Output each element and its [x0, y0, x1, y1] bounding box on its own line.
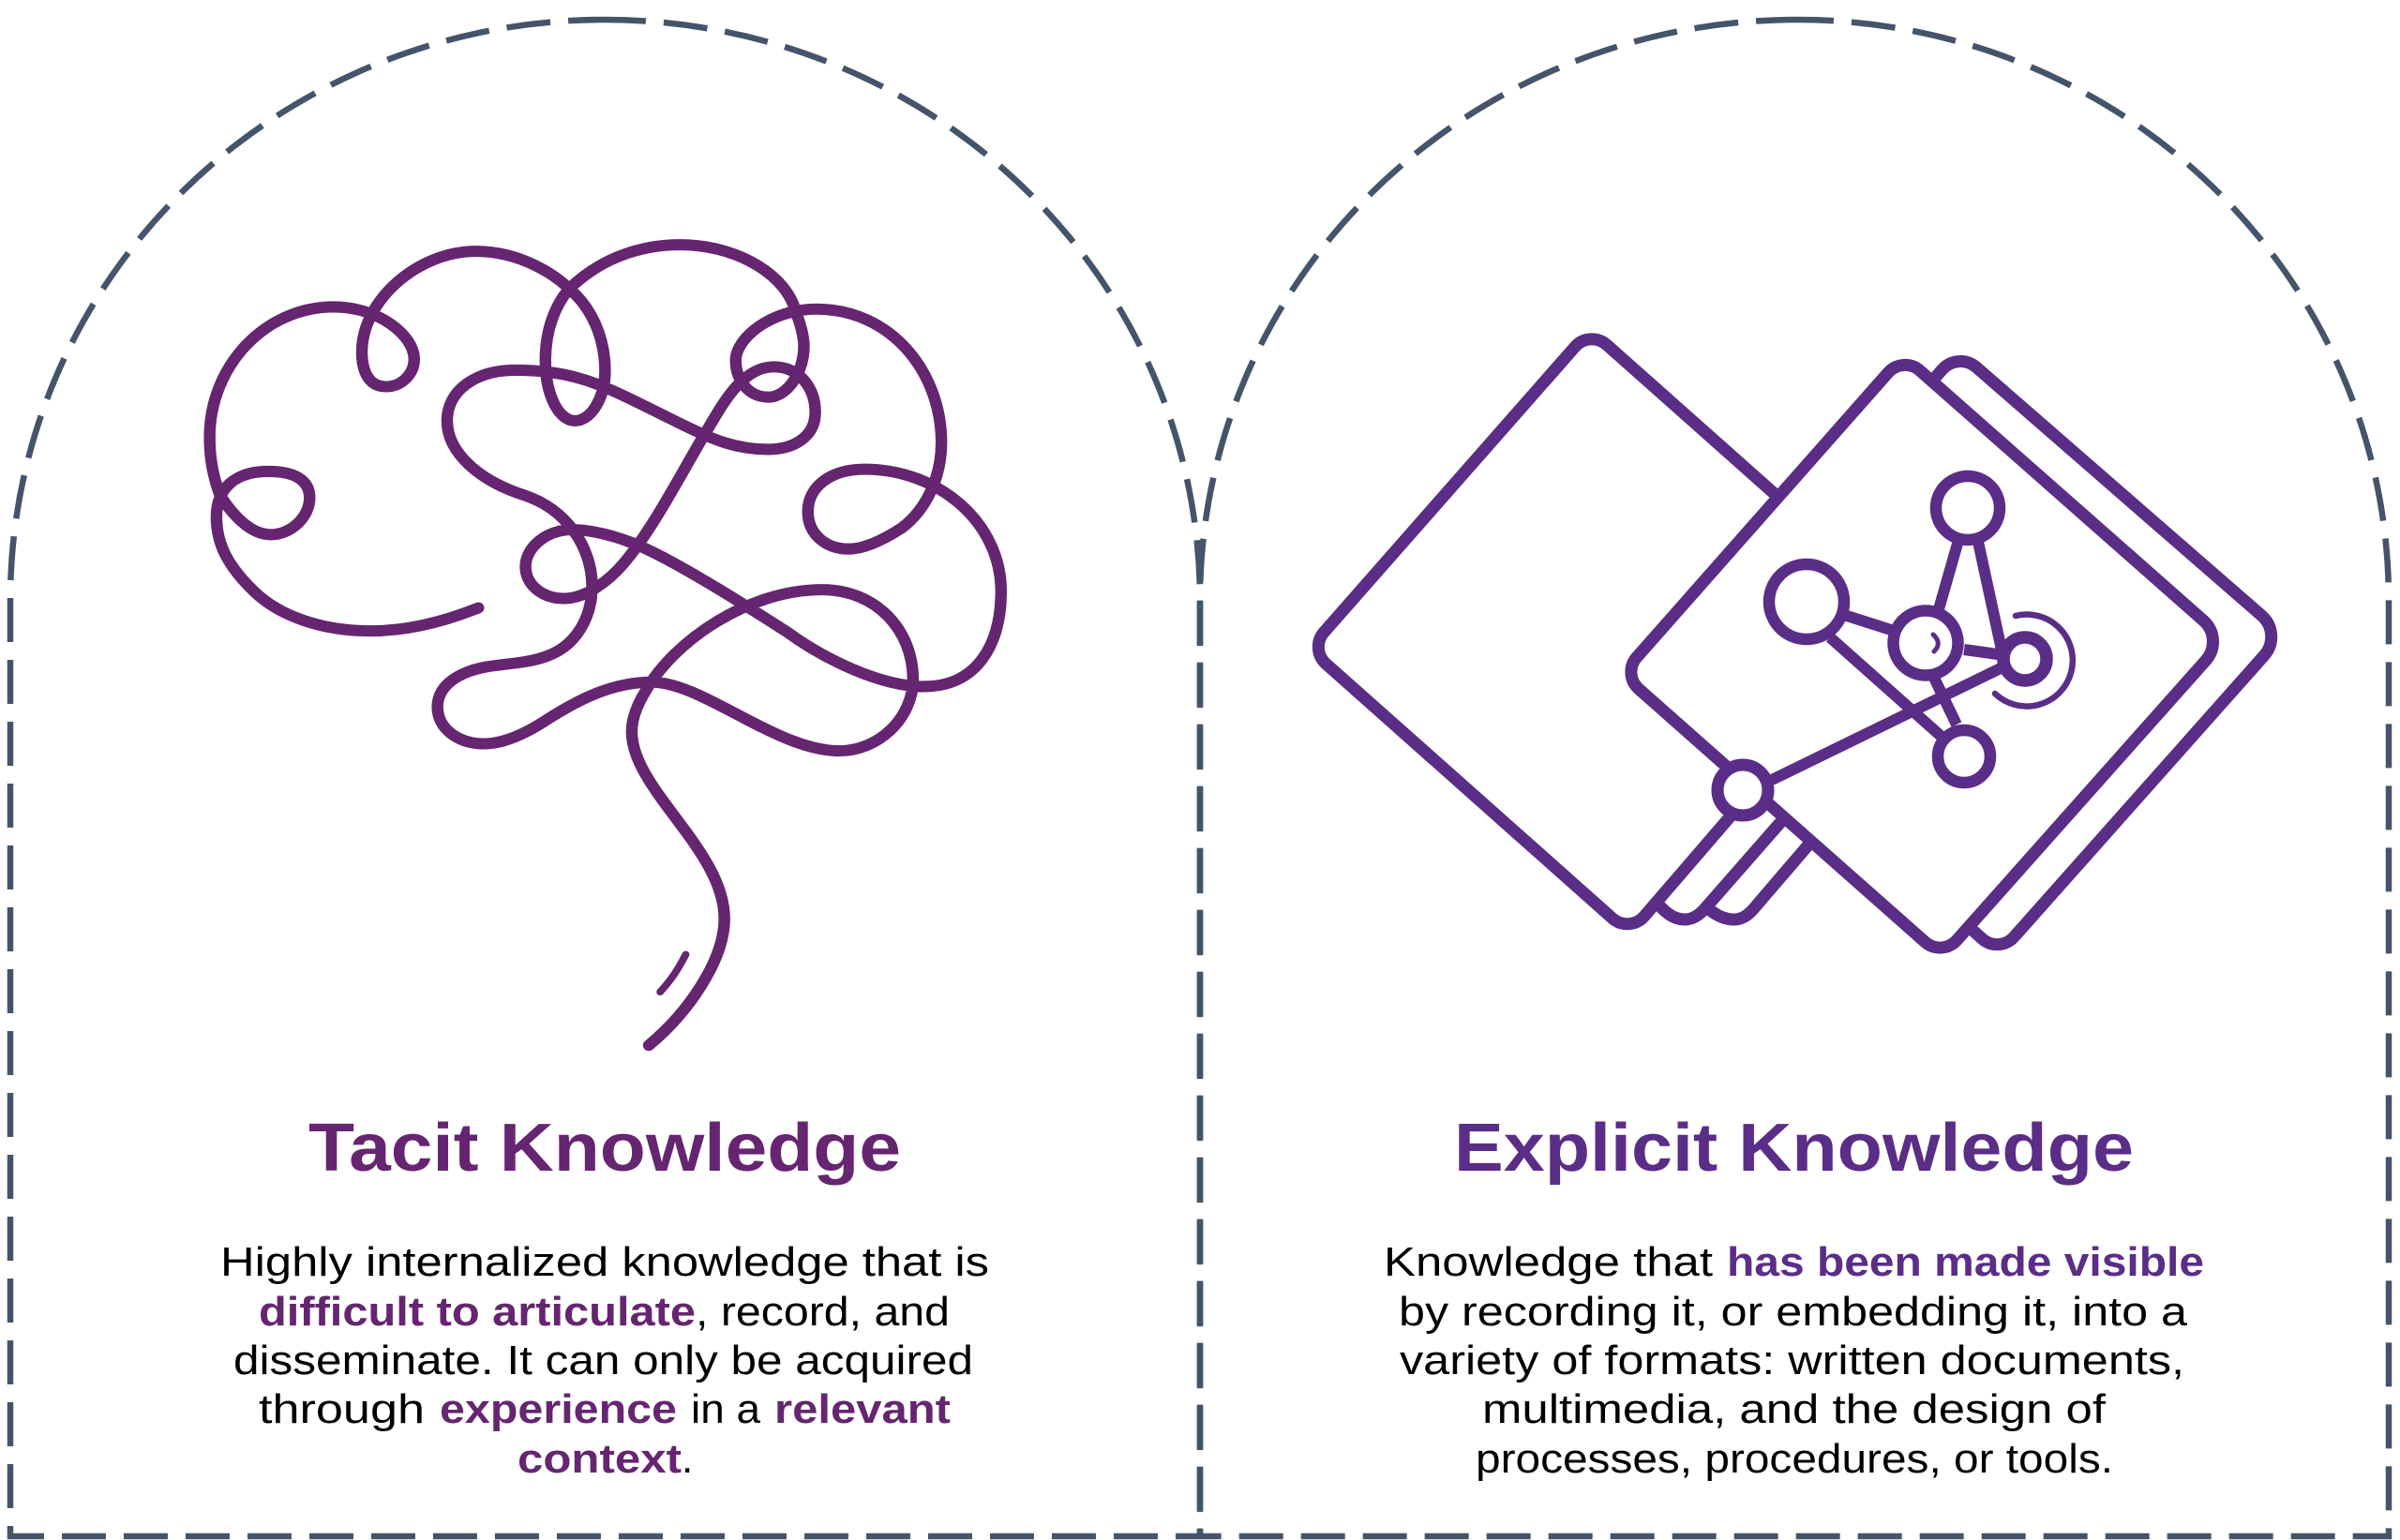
text block: tacit description: context	[518, 1436, 682, 1482]
icon: two books with knowledge network	[1318, 339, 2272, 948]
text block: tacit description: .	[682, 1436, 693, 1482]
text block: explicit description: multimedia, and the design of	[1482, 1386, 2107, 1432]
panel: explicit knowledge	[1200, 20, 2389, 1536]
text block: tacit description: difficult to articulate	[259, 1289, 696, 1335]
text block: explicit description: Knowledge that	[1384, 1239, 1713, 1285]
text block: tacit description: disseminate. It can only be acquired	[233, 1338, 973, 1383]
text block: explicit description: has been made visible	[1727, 1239, 2204, 1285]
dashed arch outline: explicit	[1200, 20, 2389, 1536]
text block: explicit description	[1384, 1239, 2204, 1482]
right book	[1631, 362, 2272, 948]
text block: tacit description	[220, 1239, 989, 1482]
dashed arch outline: tacit	[10, 20, 1200, 1536]
text block: tacit description: experience	[440, 1386, 677, 1432]
text block: tacit description: Highly internalized knowledge that is	[220, 1239, 989, 1285]
panel: tacit knowledge	[10, 20, 1200, 1536]
text block: explicit description: by recording it, or embedding it, into a	[1399, 1289, 2188, 1335]
text block: tacit description: through	[259, 1386, 425, 1432]
text block: explicit description: processes, procedures, or tools.	[1476, 1436, 2113, 1482]
text block: tacit description: , record, and	[696, 1289, 950, 1335]
signal arc and glint	[1933, 615, 2073, 707]
text block: explicit description: variety of formats: written documents,	[1400, 1338, 2184, 1383]
text block: tacit description: relevant	[774, 1386, 951, 1432]
text block: tacit description: in a	[691, 1386, 761, 1432]
icon: tangled line brain	[210, 245, 1001, 1045]
left book	[1318, 339, 1816, 924]
heading: explicit knowledge: Explicit Knowledge	[1454, 1111, 2134, 1186]
network links	[1772, 542, 2011, 780]
heading: tacit knowledge: Tacit Knowledge	[308, 1111, 901, 1186]
network nodes	[1718, 476, 2047, 815]
